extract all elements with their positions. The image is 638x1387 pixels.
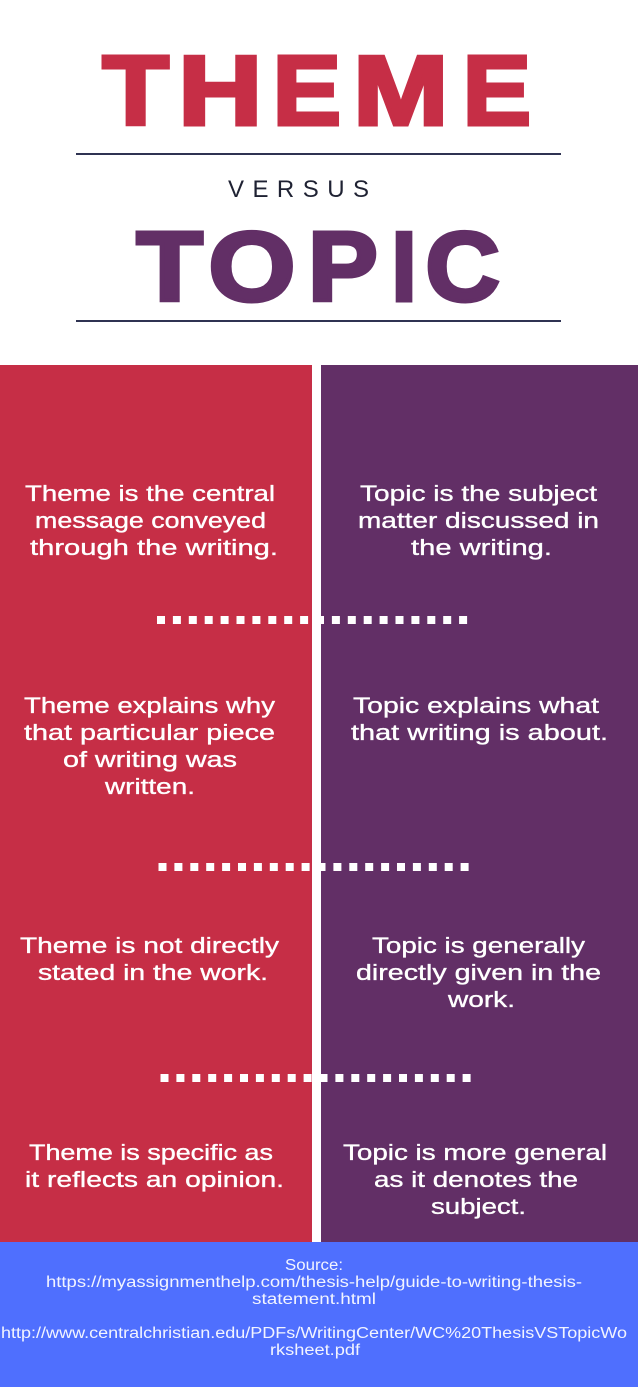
text: topic point 1: matter discussed in <box>358 508 599 533</box>
text: topic point 4: subject. <box>431 1194 526 1219</box>
subtitle: versus: VERSUS <box>228 176 369 203</box>
text: theme point 2 <box>24 693 276 799</box>
text: theme point 4 <box>25 1140 284 1192</box>
text: topic point 2: Topic explains what <box>353 693 600 718</box>
text: theme point 3: stated in the work. <box>38 960 268 985</box>
text: theme point 2: written. <box>104 774 195 799</box>
text: source url 2: rksheet.pdf <box>270 1342 361 1359</box>
text: theme point 4: Theme is specific as <box>29 1140 273 1165</box>
text: topic point 4: Topic is more general <box>343 1140 607 1165</box>
title: topic: I <box>392 212 417 321</box>
text: theme point 2: of writing was <box>63 747 237 772</box>
text: theme point 1: message conveyed <box>35 508 266 533</box>
title: topic: C <box>426 213 500 322</box>
text: theme point 2: that particular piece <box>24 720 275 745</box>
title: topic: T <box>136 211 203 321</box>
text: theme point 3: Theme is not directly <box>20 933 280 958</box>
text: source url 2 <box>1 1325 627 1359</box>
divider bottom <box>76 320 561 322</box>
text: topic point 2: that writing is about. <box>351 720 608 745</box>
panel: sources footer <box>0 1242 638 1387</box>
text: source url 1: statement.html <box>252 1291 376 1308</box>
text: theme point 3 <box>20 933 280 985</box>
dotted separator 3 <box>160 1074 472 1082</box>
title: topic: O <box>208 213 295 322</box>
text: topic point 3 <box>356 933 601 1012</box>
text: topic point 1: Topic is the subject <box>360 481 598 506</box>
text: topic point 1 <box>358 481 599 560</box>
text: source heading: Source: <box>285 1257 343 1274</box>
title: topic <box>136 211 500 322</box>
dotted separator 2 <box>158 863 470 871</box>
text: theme point 4: it reflects an opinion. <box>25 1167 284 1192</box>
title: theme: M <box>353 36 448 146</box>
title: theme: H <box>178 36 262 145</box>
text: topic point 3: work. <box>447 987 515 1012</box>
text: theme point 2: Theme explains why <box>24 693 276 718</box>
text: topic point 4 <box>343 1140 607 1219</box>
title: topic: P <box>308 212 378 322</box>
text: source url 1 <box>46 1274 582 1308</box>
text: topic point 3: directly given in the <box>356 960 601 985</box>
divider top <box>76 153 561 155</box>
text: theme point 1: Theme is the central <box>25 481 275 506</box>
text: source url 1: https://myassignmenthelp.com/thesis-help/guide-to-writing-thesis- <box>46 1274 582 1291</box>
text: topic point 1: the writing. <box>411 535 552 560</box>
text: topic point 2 <box>351 693 608 745</box>
dotted separator 1 <box>157 616 469 624</box>
title: theme: E <box>463 36 531 146</box>
title: theme: E <box>273 36 341 146</box>
title: theme <box>102 35 531 146</box>
text: theme point 1 <box>25 481 278 560</box>
text: source url 2: http://www.centralchristian.edu/PDFs/WritingCenter/WC%20ThesisVSTopicWo <box>1 1325 627 1342</box>
title: theme: T <box>102 35 169 145</box>
text: theme point 1: through the writing. <box>30 535 278 560</box>
text: topic point 4: as it denotes the <box>374 1167 578 1192</box>
panel: theme column <box>0 365 312 1242</box>
text: topic point 3: Topic is generally <box>372 933 586 958</box>
panel: topic column <box>321 365 638 1242</box>
